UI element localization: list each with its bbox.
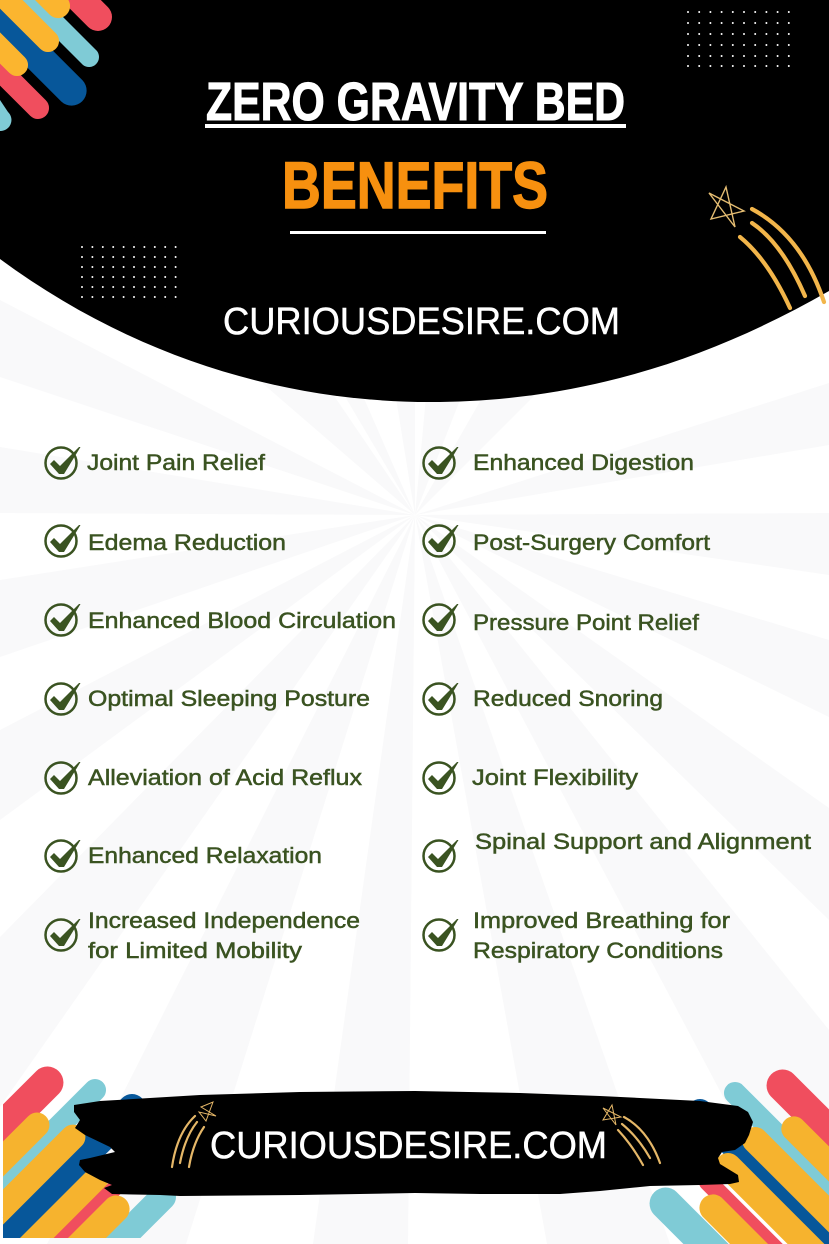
- black curved header: [0, 0, 829, 402]
- dot grid: top right: [688, 12, 790, 66]
- benefit: enhanced digestion: [424, 447, 694, 478]
- top-left colour stripes: [0, 0, 112, 131]
- benefit: pressure point relief: Pressure Point Relief: [473, 610, 700, 635]
- benefit: enhanced relaxation: [46, 840, 322, 872]
- benefit: post-surgery comfort: [424, 525, 711, 556]
- benefit: spinal support and alignment: Spinal Support and Alignment: [475, 829, 812, 854]
- benefit: alleviation of acid reflux: [46, 762, 363, 794]
- benefit: joint pain relief: Joint Pain Relief: [87, 450, 266, 475]
- icon: shooting star, banner right: [603, 1105, 660, 1165]
- benefit: post-surgery comfort: Post-Surgery Comfort: [473, 530, 711, 555]
- benefit: joint flexibility: [424, 762, 639, 794]
- benefit: optimal sleeping posture: Optimal Sleeping Posture: [88, 686, 370, 711]
- benefit: optimal sleeping posture: [46, 683, 370, 714]
- benefit: reduced snoring: [424, 683, 663, 714]
- sunburst background: [0, 300, 829, 1244]
- benefit: reduced snoring: Reduced Snoring: [473, 686, 663, 711]
- benefit: spinal support and alignment: [424, 829, 812, 872]
- benefit: joint pain relief: [46, 447, 266, 478]
- subtitle: benefits: BENEFITS: [282, 148, 548, 222]
- benefit: improved breathing: Respiratory Conditions: [473, 938, 723, 963]
- benefits list: left column: [46, 447, 396, 963]
- benefit: edema reduction: [46, 525, 286, 556]
- benefit: enhanced relaxation: Enhanced Relaxation: [88, 843, 322, 868]
- benefit: pressure point relief: [424, 604, 700, 636]
- benefit: enhanced blood circulation: [46, 604, 396, 636]
- benefit: edema reduction: Edema Reduction: [88, 530, 286, 555]
- bottom-left colour stripes: [3, 1067, 176, 1238]
- benefit: alleviation of acid reflux: Alleviation of Acid Reflux: [88, 765, 363, 790]
- benefit: enhanced digestion: Enhanced Digestion: [473, 450, 694, 475]
- benefit: joint flexibility: Joint Flexibility: [472, 765, 639, 790]
- website url: banner: CURIOUSDESIRE.COM: [210, 1125, 607, 1167]
- black brush banner: [74, 1091, 753, 1196]
- icon: shooting star, header: [709, 187, 824, 308]
- benefit: improved breathing: Improved Breathing for: [473, 908, 731, 933]
- benefit: increased independence: for Limited Mobility: [88, 938, 303, 963]
- bottom-right colour stripes: [650, 1070, 829, 1244]
- benefit: increased independence: Increased Independence: [88, 908, 360, 933]
- dot grid: left: [82, 247, 176, 297]
- benefit: improved breathing: [424, 908, 731, 963]
- benefits list: right column: [424, 447, 812, 963]
- icon: shooting star, banner left: [172, 1102, 216, 1167]
- benefit: increased independence: [46, 908, 360, 963]
- title: ZERO GRAVITY BED: [206, 72, 625, 132]
- benefit: enhanced blood circulation: Enhanced Blood Circulation: [88, 608, 396, 633]
- website url: header: CURIOUSDESIRE.COM: [223, 301, 620, 343]
